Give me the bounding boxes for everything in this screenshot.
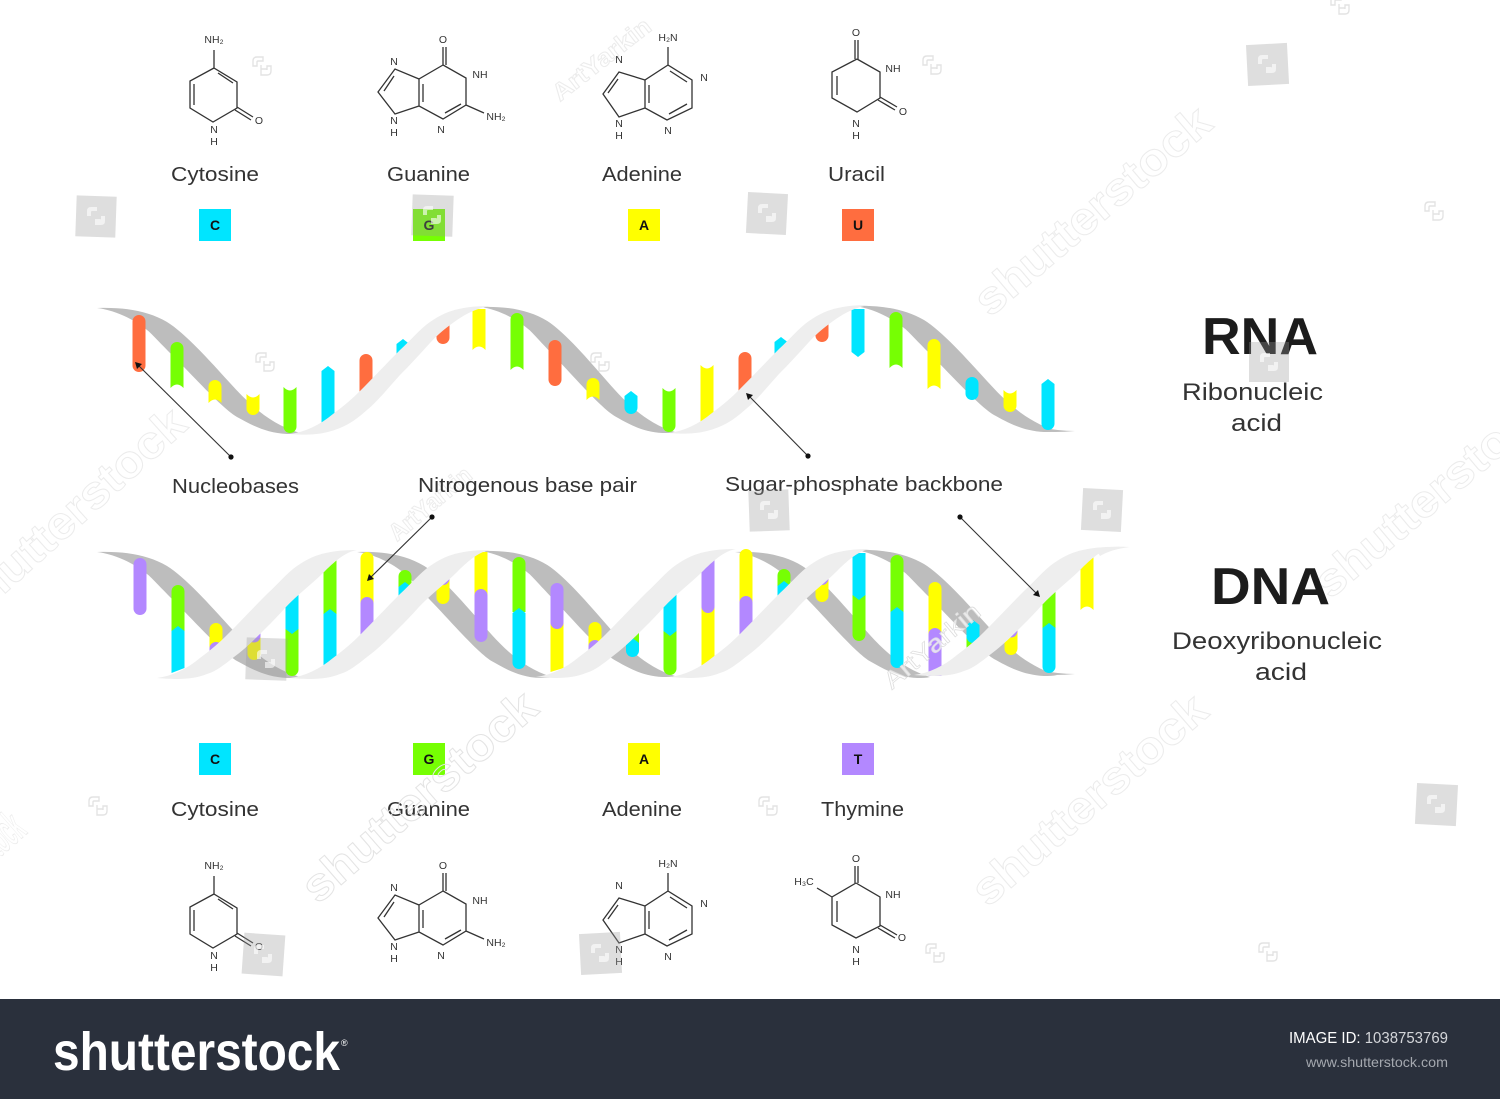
molecule: cytosine (DNA): N xyxy=(210,950,218,962)
watermark text layer: ArtYarkin xyxy=(547,13,657,107)
molecule: uracil: NH xyxy=(885,63,901,75)
bottom colour key squares xyxy=(199,743,874,775)
molecule: guanine (RNA): O xyxy=(439,34,447,46)
molecule: adenine (RNA) xyxy=(603,32,708,142)
molecule: guanine (RNA): NH xyxy=(472,69,488,81)
molecule: thymine: H₃C xyxy=(794,876,814,888)
bottom base names: Guanine xyxy=(387,799,470,821)
molecule: guanine (RNA): N xyxy=(437,124,445,136)
watermark text layer: ArtYarkin xyxy=(384,462,477,547)
watermark tiles xyxy=(75,43,1458,976)
molecule: cytosine (DNA) xyxy=(190,860,263,974)
top colour key squares: G xyxy=(424,217,435,233)
molecule: uracil: N xyxy=(852,118,860,130)
molecule: thymine: H xyxy=(852,956,860,968)
molecule: adenine (DNA): N xyxy=(700,898,708,910)
bottom colour key squares: T xyxy=(854,751,863,767)
shutterstock logo: ® xyxy=(341,1038,348,1048)
molecule: guanine (DNA): N xyxy=(390,882,398,894)
molecule: adenine (RNA): H₂N xyxy=(658,32,678,44)
shutterstock logo: shutterstock xyxy=(53,1022,341,1082)
watermark tiles: shutterstock xyxy=(290,679,548,913)
molecule: adenine (DNA): N xyxy=(615,880,623,892)
molecule: guanine (RNA): N xyxy=(390,115,398,127)
molecule: guanine (DNA): N xyxy=(437,950,445,962)
molecule: adenine (DNA): H xyxy=(615,956,623,968)
annotation labels: Sugar-phosphate backbone xyxy=(725,474,1003,496)
bottom base names: Adenine xyxy=(602,799,682,821)
molecule: adenine (DNA) xyxy=(603,858,708,968)
bottom base names: Cytosine xyxy=(171,799,259,821)
molecule: cytosine (RNA): H xyxy=(210,136,218,148)
molecule: uracil xyxy=(832,27,907,142)
top base names: Adenine xyxy=(602,164,682,186)
molecule: adenine (RNA): N xyxy=(615,54,623,66)
molecule: thymine: O xyxy=(898,932,906,944)
molecule: uracil: O xyxy=(899,106,907,118)
bottom base names xyxy=(171,799,904,821)
molecule: guanine (DNA): N xyxy=(390,941,398,953)
top base names: Cytosine xyxy=(171,164,259,186)
top base names: Uracil xyxy=(828,164,885,186)
molecule: adenine (RNA): H xyxy=(615,130,623,142)
RNA title xyxy=(1182,308,1323,437)
RNA helix xyxy=(97,305,1075,435)
molecule: adenine (DNA): N xyxy=(664,951,672,963)
website: www.shutterstock.com xyxy=(1305,1054,1448,1070)
watermark tiles: ArtYarkin xyxy=(879,598,986,695)
RNA title: acid xyxy=(1231,410,1282,437)
molecule: cytosine (RNA): O xyxy=(255,115,263,127)
molecule: thymine: NH xyxy=(885,889,901,901)
arrow: nitrogenous base pair xyxy=(367,514,435,581)
molecule: thymine: O xyxy=(852,853,860,865)
top colour key squares xyxy=(199,209,874,241)
DNA title: acid xyxy=(1255,659,1307,686)
molecule: adenine (RNA): N xyxy=(664,125,672,137)
molecule: cytosine (RNA) xyxy=(190,34,263,148)
molecule: guanine (RNA): H xyxy=(390,127,398,139)
molecule: uracil: O xyxy=(852,27,860,39)
molecule: guanine (DNA) xyxy=(378,860,506,965)
molecule: guanine (RNA) xyxy=(378,34,506,139)
molecule: adenine (DNA): H₂N xyxy=(658,858,678,870)
molecule: adenine (RNA): N xyxy=(700,72,708,84)
RNA title: Ribonucleic xyxy=(1182,379,1323,406)
footer bar xyxy=(0,999,1500,1099)
molecule: guanine (DNA): NH₂ xyxy=(486,937,506,949)
RNA title: RNA xyxy=(1202,308,1318,366)
molecule: uracil: H xyxy=(852,130,860,142)
arrow: DNA backbone xyxy=(957,514,1040,597)
molecule: cytosine (DNA): O xyxy=(255,941,263,953)
annotation labels: Nucleobases xyxy=(172,476,299,498)
watermark text layer: shutterstock xyxy=(963,95,1221,326)
bottom base names: Thymine xyxy=(821,799,904,821)
DNA title: Deoxyribonucleic xyxy=(1172,628,1382,655)
watermark text layer: shutterstock xyxy=(960,682,1218,916)
top colour key squares: C xyxy=(210,217,220,233)
molecule: guanine (DNA): H xyxy=(390,953,398,965)
annotation labels: Nitrogenous base pair xyxy=(418,475,637,497)
molecule: adenine (DNA): N xyxy=(615,944,623,956)
molecule: guanine (DNA): NH xyxy=(472,895,488,907)
bottom colour key squares: A xyxy=(639,751,649,767)
arrow: RNA backbone xyxy=(746,393,811,459)
molecule: guanine (RNA): N xyxy=(390,56,398,68)
molecule: thymine: N xyxy=(852,944,860,956)
top base names: Guanine xyxy=(387,164,470,186)
bottom colour key squares: G xyxy=(424,751,435,767)
molecule: cytosine (RNA): NH₂ xyxy=(204,34,224,46)
top colour key squares: A xyxy=(639,217,649,233)
molecule: adenine (RNA): N xyxy=(615,118,623,130)
molecule: cytosine (DNA): NH₂ xyxy=(204,860,224,872)
top base names xyxy=(171,164,885,186)
molecule: cytosine (DNA): H xyxy=(210,962,218,974)
DNA title xyxy=(1172,558,1382,686)
DNA helix xyxy=(97,547,1130,679)
image id: IMAGE ID: 1038753769 xyxy=(1289,1030,1448,1047)
arrow: nucleobases xyxy=(135,362,234,460)
molecule: guanine (RNA): NH₂ xyxy=(486,111,506,123)
annotation labels xyxy=(172,474,1003,498)
bottom colour key squares: C xyxy=(210,751,220,767)
molecule: cytosine (RNA): N xyxy=(210,124,218,136)
molecule: guanine (DNA): O xyxy=(439,860,447,872)
molecule: thymine xyxy=(794,853,906,968)
DNA title: DNA xyxy=(1211,558,1330,616)
top colour key squares: U xyxy=(853,217,863,233)
